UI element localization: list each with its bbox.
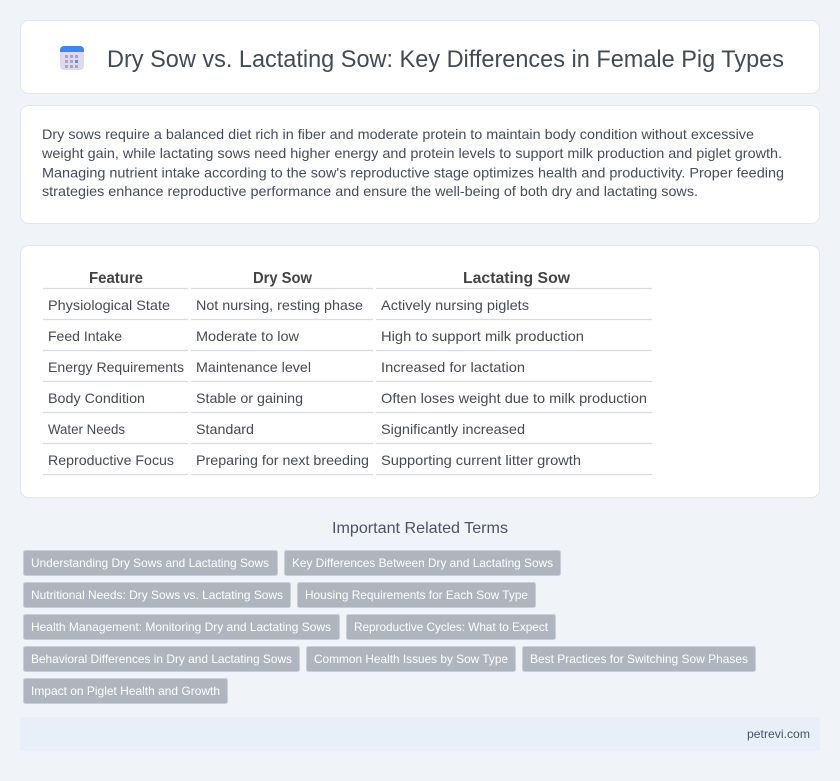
tag: Health Management: Monitoring Dry and Lactating Sows xyxy=(31,620,331,634)
table header: Lactating Sow xyxy=(463,270,571,287)
tag: Nutritional Needs: Dry Sows vs. Lactating Sows xyxy=(31,588,283,602)
tag xyxy=(306,646,516,672)
panel: header xyxy=(20,20,820,94)
tag: Housing Requirements for Each Sow Type xyxy=(305,588,528,602)
row: energy requirements xyxy=(48,359,525,375)
tag: Key Differences Between Dry and Lactating Sows xyxy=(292,556,553,570)
row: feed intake: High to support milk production xyxy=(381,328,584,344)
footer text: petrevi.com xyxy=(747,727,810,741)
row: physiological state: Actively nursing piglets xyxy=(381,297,529,313)
row: energy requirements: Increased for lactation xyxy=(381,359,525,375)
row: water needs: Significantly increased xyxy=(381,421,525,437)
tag xyxy=(24,614,340,640)
text block: summary: weight gain, while lactating sows need higher energy and protein levels to support milk production and piglet growth. xyxy=(41,145,782,161)
panel: summary paragraph xyxy=(20,106,820,224)
table header: Feature xyxy=(89,270,143,287)
footer xyxy=(20,717,820,751)
table grid lines xyxy=(43,288,652,474)
tag xyxy=(346,614,556,640)
tag xyxy=(24,646,300,672)
tag xyxy=(24,550,278,576)
row: body condition: Stable or gaining xyxy=(196,390,303,406)
tag xyxy=(298,582,536,608)
row: physiological state: Physiological State xyxy=(48,297,170,313)
row: feed intake: Moderate to low xyxy=(196,328,300,344)
row: body condition: Often loses weight due to milk production xyxy=(381,390,647,406)
heading: related terms: Important Related Terms xyxy=(332,520,508,537)
row: water needs xyxy=(48,421,525,437)
row: feed intake xyxy=(48,328,584,344)
row: energy requirements: Maintenance level xyxy=(196,359,311,375)
tag: Behavioral Differences in Dry and Lactating Sows xyxy=(31,652,292,666)
row: water needs: Water Needs xyxy=(48,421,125,437)
row: physiological state: Not nursing, resting phase xyxy=(196,297,363,313)
panel: comparison table xyxy=(20,246,820,498)
tag: Impact on Piglet Health and Growth xyxy=(31,684,220,698)
title: Dry Sow vs. Lactating Sow: Key Differences in Female Pig Types xyxy=(107,46,784,73)
tag xyxy=(522,646,756,672)
text block: summary: strategies enhance reproductive performance and ensure the well-being of both dry and lactating sows. xyxy=(42,183,698,199)
row: body condition xyxy=(48,390,647,406)
tag xyxy=(24,678,228,704)
row: reproductive focus: Preparing for next breeding xyxy=(196,452,369,468)
tag: Understanding Dry Sows and Lactating Sows xyxy=(31,556,269,570)
tag xyxy=(284,550,560,576)
tag: Common Health Issues by Sow Type xyxy=(314,652,508,666)
row: reproductive focus: Supporting current litter growth xyxy=(381,452,581,468)
text block: summary: Dry sows require a balanced diet rich in fiber and moderate protein to maintain body condition without excessive xyxy=(42,126,754,142)
row: reproductive focus xyxy=(48,452,581,468)
tag xyxy=(24,582,290,608)
text block: summary: Managing nutrient intake according to the sow's reproductive stage optimizes health and productivity. Proper feeding xyxy=(42,164,784,180)
table header xyxy=(89,270,571,287)
row: physiological state xyxy=(48,297,529,313)
icon: calendar xyxy=(60,46,84,70)
table header: Dry Sow xyxy=(253,270,313,287)
text block: summary xyxy=(41,126,784,199)
row: reproductive focus: Reproductive Focus xyxy=(48,452,174,468)
panel: related term tags xyxy=(24,550,756,704)
row: water needs: Standard xyxy=(196,421,254,437)
row: energy requirements: Energy Requirements xyxy=(48,359,184,375)
tag: Best Practices for Switching Sow Phases xyxy=(530,652,748,666)
row: feed intake: Feed Intake xyxy=(48,328,122,344)
tag: Reproductive Cycles: What to Expect xyxy=(354,620,549,634)
row: body condition: Body Condition xyxy=(48,390,145,406)
